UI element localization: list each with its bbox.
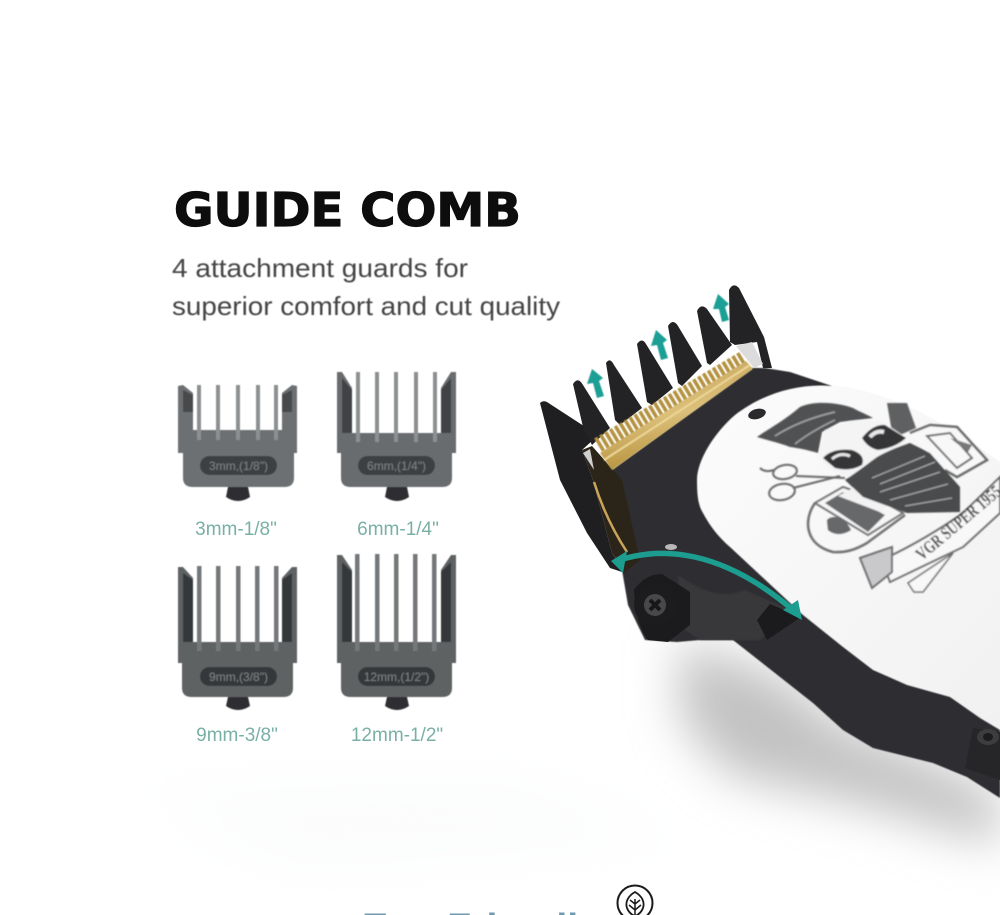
comb: 9mm: 9mm,(3/8")	[209, 670, 268, 684]
subtitle: 4 attachment guards for	[172, 253, 468, 283]
skull barber logo	[757, 403, 1000, 592]
right frame	[910, 425, 987, 477]
comb guard left side	[540, 401, 625, 573]
comb teeth	[573, 285, 772, 445]
brush	[860, 547, 892, 588]
label: 6mm-1/4: 6mm-1/4"	[357, 519, 439, 540]
comb: 12mm: 12mm,(1/2")	[364, 670, 429, 684]
comb: 6mm	[337, 372, 456, 501]
icon: leaf badge	[618, 886, 652, 915]
comb: 12mm	[337, 554, 456, 710]
clipper	[540, 285, 1000, 798]
rear knob	[965, 728, 1000, 780]
comb: 3mm	[178, 385, 297, 501]
guard inner metal side	[582, 446, 640, 572]
lever recess shading	[678, 575, 790, 640]
title: GUIDE COMB	[174, 183, 521, 237]
teal rotation arrow	[611, 551, 802, 620]
clipper black body and handle	[612, 368, 1000, 798]
clipper white body	[697, 385, 1000, 730]
hair	[757, 403, 873, 453]
label: 9mm-3/8: 9mm-3/8"	[196, 725, 278, 746]
comb: 3mm: 3mm,(1/8")	[209, 459, 268, 473]
beard	[845, 443, 960, 513]
comb: 9mm	[178, 566, 297, 710]
scissors	[760, 463, 845, 502]
metal corner of blade	[736, 342, 763, 368]
comb: 6mm: 6mm,(1/4")	[367, 459, 426, 473]
banner	[882, 477, 1000, 582]
skull	[818, 420, 907, 478]
razor stripe behind	[887, 403, 916, 438]
floor shadow under clipper	[130, 640, 1000, 870]
hole in body	[747, 407, 767, 421]
pivot knob	[634, 544, 690, 642]
subtitle	[172, 253, 560, 321]
subtitle: superior comfort and cut quality	[172, 291, 560, 321]
razor	[908, 553, 953, 592]
label: 12mm-1/2: 12mm-1/2"	[351, 725, 443, 746]
sunglasses	[823, 450, 863, 469]
mug shape	[808, 503, 905, 552]
gold blade	[598, 358, 753, 470]
teal up arrows	[587, 294, 729, 398]
label: 3mm-1/8: 3mm-1/8"	[195, 519, 277, 540]
